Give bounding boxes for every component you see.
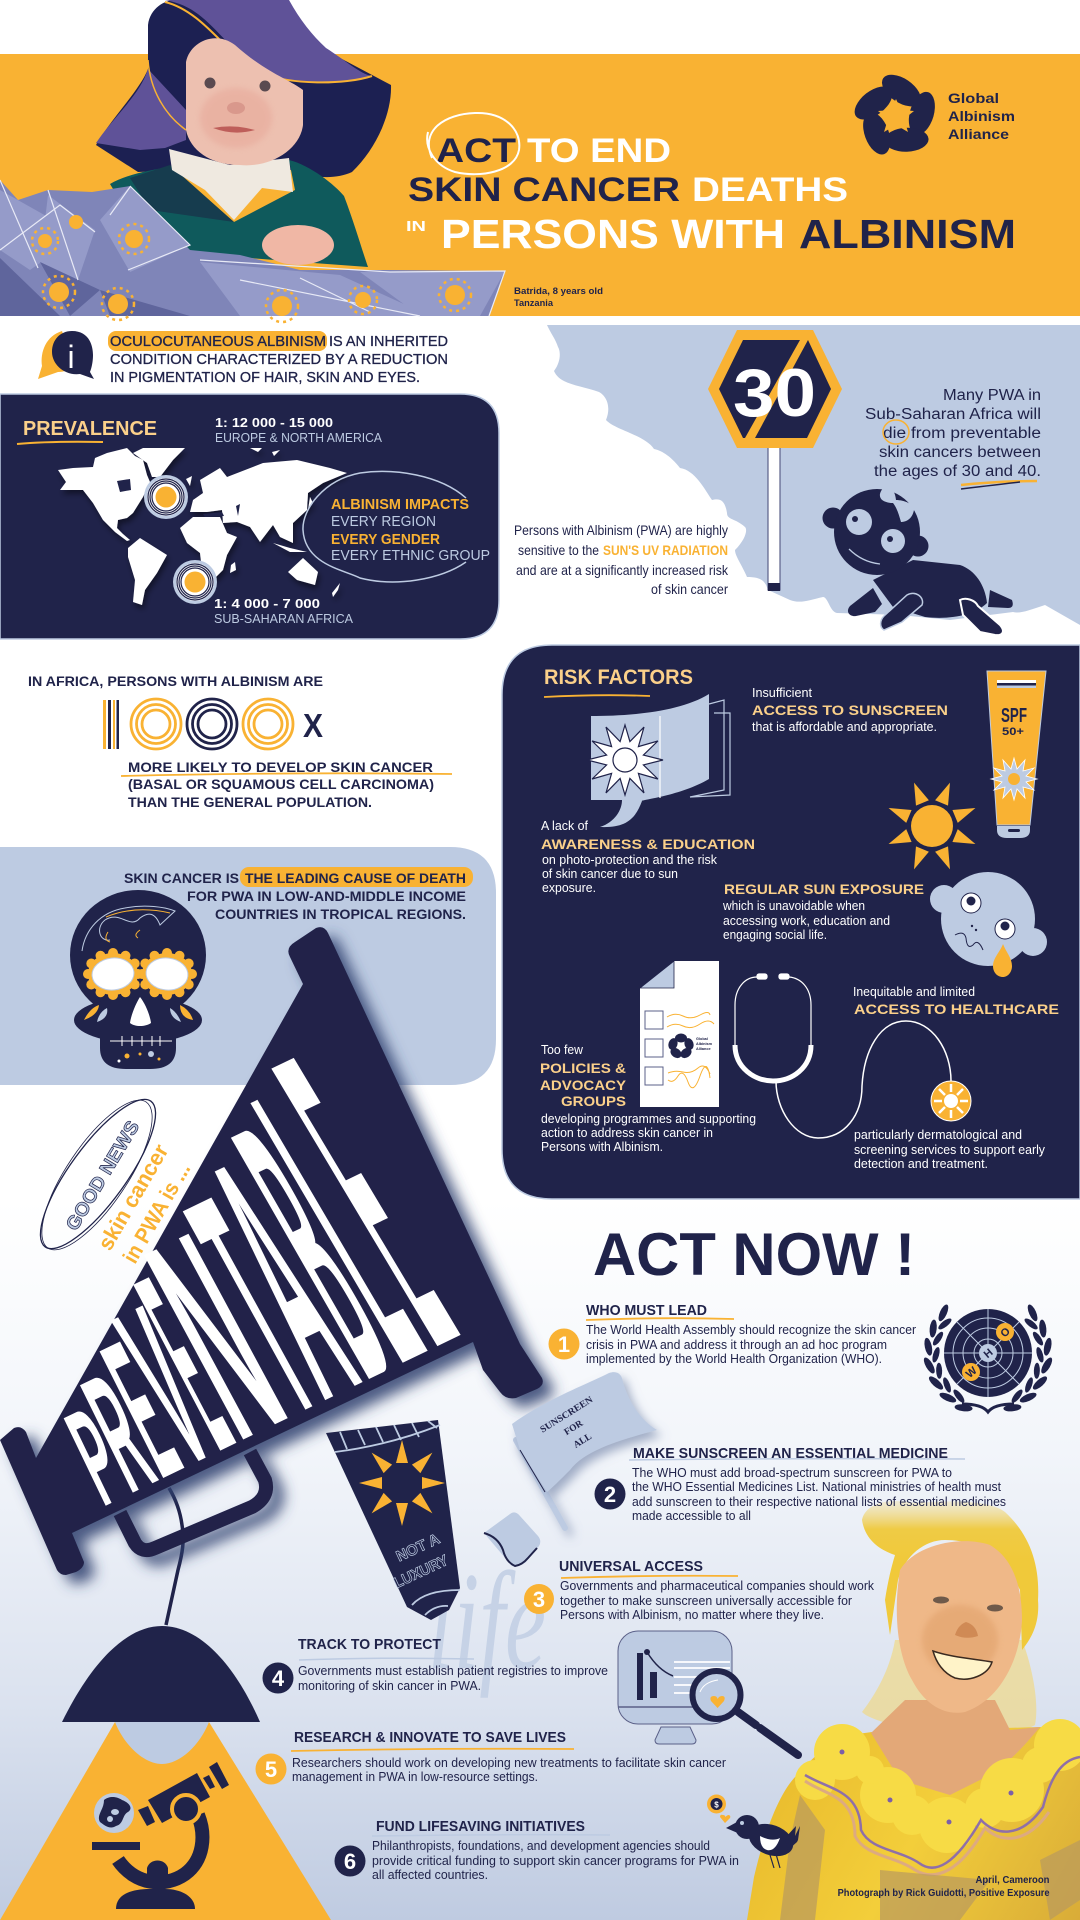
icon: sugar skull: [70, 890, 206, 1069]
factor: policies and advocacy groups: ADVOCACY: [540, 1077, 627, 1093]
illustration: bird with coin: [707, 1794, 800, 1868]
action 4: track to protect: TRACK TO PROTECT: [298, 1636, 441, 1653]
heading: risk factors: RISK FACTORS: [544, 666, 693, 689]
factor: regular sun exposure: [722, 881, 924, 942]
factor: awareness and education: exposure.: [542, 881, 596, 895]
action 2: essential medicine: [594, 1445, 1006, 1523]
action 3: universal access: together to make sunscreen universally accessible for: [560, 1593, 853, 1608]
action 3: universal access: [524, 1558, 874, 1622]
illustration: not a luxury tube: LUXURY: [391, 1552, 451, 1592]
section: 1000x more likely: [28, 674, 452, 810]
action 2: essential medicine: add sunscreen to their respective national lists of essential medicines: [632, 1494, 1006, 1509]
factor: regular sun exposure: REGULAR SUN EXPOSURE: [724, 881, 924, 897]
big word: PREVENTABLE: L: [200, 1010, 477, 1445]
heading: act now: ACT NOW !: [593, 1221, 915, 1288]
factor: policies and advocacy groups: [540, 1043, 756, 1154]
sign: 30: [708, 330, 842, 591]
illustration: tube cap: [484, 1512, 540, 1566]
prevalence Sub-Saharan Africa: 1: 4 000 - 7 000: [214, 596, 320, 611]
prevalence Europe and North America: [215, 415, 383, 445]
logo: Global Albinism Alliance: Alliance: [948, 126, 1009, 142]
title: TO END: [527, 132, 671, 170]
callout: skin cancer in PWA is: skin cancer: [93, 1139, 174, 1254]
lamp with light cone: [0, 1488, 331, 1920]
callout: good news: [22, 1085, 174, 1265]
icon: policy document: Global: [696, 1037, 708, 1041]
title: PERSONS WITH: [441, 211, 785, 257]
action 1: WHO must lead: The World Health Assembly should recognize the skin cancer: [586, 1322, 917, 1337]
text: many PWA: Sub-Saharan Africa will: [865, 406, 1041, 423]
icon: WHO emblem: W: [964, 1364, 980, 1381]
action 1: WHO must lead: WHO MUST LEAD: [586, 1302, 707, 1319]
factor: regular sun exposure: engaging social life.: [723, 928, 827, 942]
action 3: universal access: UNIVERSAL ACCESS: [559, 1558, 703, 1575]
big word: PREVENTABLE: B: [185, 1048, 440, 1455]
big word: PREVENTABLE: E: [216, 969, 514, 1433]
action 1: WHO must lead: 1: [558, 1332, 570, 1357]
action 2: essential medicine: MAKE SUNSCREEN AN ESSENTIAL MEDICINE: [633, 1445, 948, 1462]
prevalence Sub-Saharan Africa: SUB-SAHARAN AFRICA: [214, 612, 354, 626]
big word: PREVENTABLE: [0, 949, 514, 1597]
text: sensitivity to UV: of skin cancer: [651, 581, 728, 597]
text: sensitivity to UV: sensitive to the: [518, 542, 599, 558]
panel: leading cause of death: COUNTRIES IN TROPICAL REGIONS.: [215, 907, 466, 922]
icon: sunscreen tube SPF 50+: 50+: [1002, 726, 1024, 738]
factor: access to healthcare: particularly dermatological and: [854, 1128, 1022, 1142]
photo caption: Batrida, 8 years old: [514, 286, 603, 297]
illustration: sunscreen for all flag: SUNSCREEN: [539, 1395, 595, 1435]
title: ACT: [436, 132, 516, 170]
intro: oculocutaneous albinism: [38, 331, 448, 386]
title: ALBINISM: [799, 211, 1016, 257]
factor: awareness and education: of skin cancer due to sun: [542, 867, 678, 881]
action 4: track to protect: monitoring of skin cancer in PWA.: [298, 1678, 481, 1693]
icon: WHO emblem: [922, 1303, 1054, 1412]
panel: leading cause of death: FOR PWA IN LOW-AND-MIDDLE INCOME: [187, 889, 466, 904]
factor: policies and advocacy groups: developing programmes and supporting: [541, 1112, 756, 1126]
marker: Europe and North America: [144, 475, 188, 519]
illustration: sunscreen for all flag: ALL: [572, 1432, 594, 1451]
number: 1000 x: X: [303, 707, 323, 744]
inland seas on the map: [117, 479, 240, 517]
photo caption: April, Cameroon: Photograph by Rick Guidotti, Positive Exposure: [838, 1887, 1050, 1899]
illustration: sunscreen for all flag: FOR: [563, 1419, 585, 1438]
factor: awareness and education: AWARENESS & EDUCATION: [541, 836, 755, 852]
big word: PREVENTABLE: T: [147, 1134, 359, 1479]
section: 1000x more likely: IN AFRICA, PERSONS WITH ALBINISM ARE: [28, 674, 323, 689]
action 5: research and innovate: 5: [265, 1757, 277, 1782]
action 3: universal access: 3: [533, 1587, 545, 1612]
panel: leading cause of death: SKIN CANCER IS: [124, 871, 239, 886]
factor: policies and advocacy groups: POLICIES &: [540, 1060, 626, 1076]
big word: PREVENTABLE: P: [48, 1380, 143, 1535]
factor: access to healthcare: Inequitable and limited: [853, 985, 975, 999]
factor: access to sunscreen: Insufficient: [752, 686, 813, 700]
action 3: universal access: Governments and pharmaceutical companies should work: [560, 1578, 874, 1593]
illustration: bird with coin: $: [714, 1800, 719, 1810]
factor: awareness and education: on photo-protection and the risk: [542, 853, 718, 867]
callout: skin cancer in PWA is: in PWA is ...: [118, 1158, 195, 1268]
text: sensitivity to UV: Persons with Albinism (PWA) are highly: [514, 522, 728, 538]
action 6: fund lifesaving initiatives: Philanthropists, foundations, and development agencies should: [372, 1838, 710, 1853]
section: 1000x more likely: MORE LIKELY TO DEVELOP SKIN CANCER: [128, 760, 433, 775]
factor: access to healthcare: detection and treatment.: [854, 1157, 988, 1171]
factor: regular sun exposure: accessing work, education and: [723, 914, 890, 928]
panel: risk factors: [502, 645, 1080, 1199]
text: sensitivity to UV: [514, 522, 729, 597]
factor: access to sunscreen: that is affordable and appropriate.: [752, 720, 937, 734]
action 6: fund lifesaving initiatives: [334, 1818, 739, 1882]
number: 1000 x: [103, 699, 323, 749]
text: many PWA: die from preventable: [883, 425, 1041, 442]
photo caption: April, Cameroon: [838, 1874, 1050, 1899]
panel: prevalence: [0, 394, 499, 639]
action 2: essential medicine: The WHO must add broad-spectrum sunscreen for PWA to: [632, 1465, 952, 1480]
action 1: WHO must lead: [548, 1302, 917, 1366]
icon: info bubble: i: [67, 339, 75, 375]
text: sensitivity to UV: SUN'S UV RADIATION: [603, 542, 728, 558]
action 4: track to protect: Governments must establish patient registries to improve: [298, 1663, 608, 1678]
icon: stethoscope: [735, 974, 971, 1138]
illustration: not a luxury tube: NOT A: [394, 1530, 443, 1565]
action 5: research and innovate: RESEARCH & INNOVATE TO SAVE LIVES: [294, 1729, 566, 1746]
action 1: WHO must lead: implemented by the World Health Organization (WHO).: [586, 1351, 882, 1366]
albinism impacts list: EVERY GENDER: [331, 531, 440, 548]
logo: Global Albinism Alliance: [849, 68, 1015, 158]
header banner: [0, 0, 1080, 322]
action 6: fund lifesaving initiatives: all affected countries.: [372, 1867, 488, 1882]
logo: Global Albinism Alliance: Albinism: [948, 108, 1015, 124]
icon: policy document: [640, 961, 719, 1107]
intro: oculocutaneous albinism: OCULOCUTANEOUS ALBINISM: [110, 333, 326, 350]
tube sun rays: [359, 1440, 445, 1526]
script word: life: life: [428, 1544, 546, 1699]
albinism impacts list: EVERY ETHNIC GROUP: [331, 547, 490, 564]
photo caption: [514, 286, 603, 309]
factor: policies and advocacy groups: GROUPS: [561, 1093, 626, 1109]
icon: crying face: [930, 872, 1047, 977]
big word: PREVENTABLE: V: [87, 1259, 242, 1512]
illustration: sunscreen for all flag: [512, 1372, 657, 1528]
illustration: not a luxury tube: [326, 1420, 460, 1620]
big word: PREVENTABLE: N: [108, 1174, 324, 1500]
intro: oculocutaneous albinism: IN PIGMENTATION OF HAIR, SKIN AND EYES.: [110, 369, 420, 386]
action 6: fund lifesaving initiatives: FUND LIFESAVING INITIATIVES: [376, 1818, 585, 1835]
photo caption: Tanzania: [514, 298, 554, 309]
factor: access to healthcare: ACCESS TO HEALTHCARE: [854, 1001, 1059, 1017]
big word: PREVENTABLE: A: [161, 1091, 403, 1470]
factor: policies and advocacy groups: Persons with Albinism.: [541, 1140, 663, 1154]
icon: info bubble: [38, 331, 94, 379]
albinism impacts list: [331, 496, 490, 564]
heading: prevalence: PREVALENCE: [23, 418, 157, 440]
icon: sun: [886, 780, 978, 872]
intro: oculocutaneous albinism: CONDITION CHARACTERIZED BY A REDUCTION: [110, 351, 448, 368]
title: [406, 113, 1016, 257]
action 6: fund lifesaving initiatives: 6: [344, 1849, 356, 1874]
big word: PREVENTABLE: R: [61, 1339, 176, 1527]
icon: policy document: Alliance: [696, 1047, 711, 1051]
panel: leading cause of death: [0, 847, 496, 1085]
text: many PWA: Many PWA in: [943, 387, 1041, 404]
logo: Global Albinism Alliance: Global: [948, 90, 999, 106]
cloud background: [547, 325, 1080, 625]
title: IN: [406, 218, 426, 235]
action 5: research and innovate: Researchers should work on developing new treatments to facilitate skin cancer: [292, 1755, 727, 1770]
factor: awareness and education: [541, 819, 755, 895]
intro: oculocutaneous albinism: IS AN INHERITED: [329, 333, 448, 350]
action 5: research and innovate: [256, 1729, 727, 1784]
title: SKIN CANCER: [408, 171, 680, 209]
prevalence Europe and North America: 1: 12 000 - 15 000: [215, 415, 333, 430]
factor: access to healthcare: [853, 985, 1059, 1171]
albinism impacts list: ALBINISM IMPACTS: [331, 496, 469, 513]
prevalence Sub-Saharan Africa: [214, 596, 354, 626]
factor: access to healthcare: screening services to support early: [854, 1143, 1046, 1157]
factor: access to sunscreen: ACCESS TO SUNSCREEN: [752, 702, 948, 718]
action 2: essential medicine: the WHO Essential Medicines List. National ministries of health must: [632, 1479, 1001, 1494]
world map: [58, 448, 347, 605]
icon: policy document: Albinism: [696, 1042, 713, 1046]
section: 1000x more likely: THAN THE GENERAL POPULATION.: [128, 795, 372, 810]
callout: good news: GOOD NEWS: [62, 1117, 144, 1235]
icon: microscope: [92, 1762, 229, 1909]
prevalence Europe and North America: EUROPE & NORTH AMERICA: [215, 431, 383, 445]
text: many PWA: skin cancers between: [879, 444, 1041, 461]
sign: 30: 30: [733, 355, 816, 431]
big word: PREVENTABLE: E: [105, 1226, 265, 1504]
icon: monitor with magnifier: [618, 1631, 798, 1755]
section: 1000x more likely: (BASAL OR SQUAMOUS CELL CARCINOMA): [128, 777, 434, 792]
factor: awareness and education: A lack of: [541, 819, 589, 833]
text: sensitivity to UV: and are at a significantly increased risk: [516, 562, 729, 578]
title: DEATHS: [692, 171, 848, 209]
panel: leading cause of death: THE LEADING CAUSE OF DEATH: [245, 871, 466, 886]
text: many PWA: the ages of 30 and 40.: [874, 463, 1041, 480]
albinism impacts list: EVERY REGION: [331, 513, 436, 530]
action 3: universal access: Persons with Albinism, no matter where they live.: [560, 1607, 824, 1622]
action 4: track to protect: 4: [272, 1666, 285, 1691]
icon: sunscreen tube SPF 50+: [987, 671, 1046, 838]
photo caption: April, Cameroon: April, Cameroon: [976, 1874, 1050, 1886]
factor: policies and advocacy groups: Too few: [541, 1043, 584, 1057]
icon: book with sun: [587, 694, 730, 827]
factor: regular sun exposure: which is unavoidable when: [722, 899, 865, 913]
illustration: crawling baby: [822, 486, 1013, 635]
marker: Sub-Saharan Africa: [173, 560, 217, 604]
icon: WHO emblem: H: [982, 1347, 996, 1361]
action 6: fund lifesaving initiatives: provide critical funding to support skin cancer programs for PWA in: [372, 1853, 739, 1868]
action 2: essential medicine: 2: [604, 1482, 616, 1507]
laurel wreath: [922, 1303, 1054, 1412]
big word: PREVENTABLE: E: [77, 1300, 206, 1519]
arc around impact text: [303, 471, 466, 582]
factor: access to sunscreen: [752, 686, 948, 734]
text: many PWA: [865, 387, 1041, 489]
photo: child in purple hat with sunscreen tubes: [0, 0, 505, 322]
action 4: track to protect: [262, 1636, 608, 1694]
photo: smiling woman in yellow: [747, 1501, 1080, 1920]
icon: WHO emblem: O: [999, 1325, 1013, 1340]
action 5: research and innovate: management in PWA in low-resource settings.: [292, 1769, 538, 1784]
megaphone: [0, 927, 543, 1597]
icon: sunscreen tube SPF 50+: SPF: [1001, 705, 1027, 727]
factor: policies and advocacy groups: action to address skin cancer in: [541, 1126, 713, 1140]
action 2: essential medicine: made accessible to all: [632, 1508, 751, 1523]
action 1: WHO must lead: crisis in PWA and address it through an ad hoc program: [586, 1337, 887, 1352]
